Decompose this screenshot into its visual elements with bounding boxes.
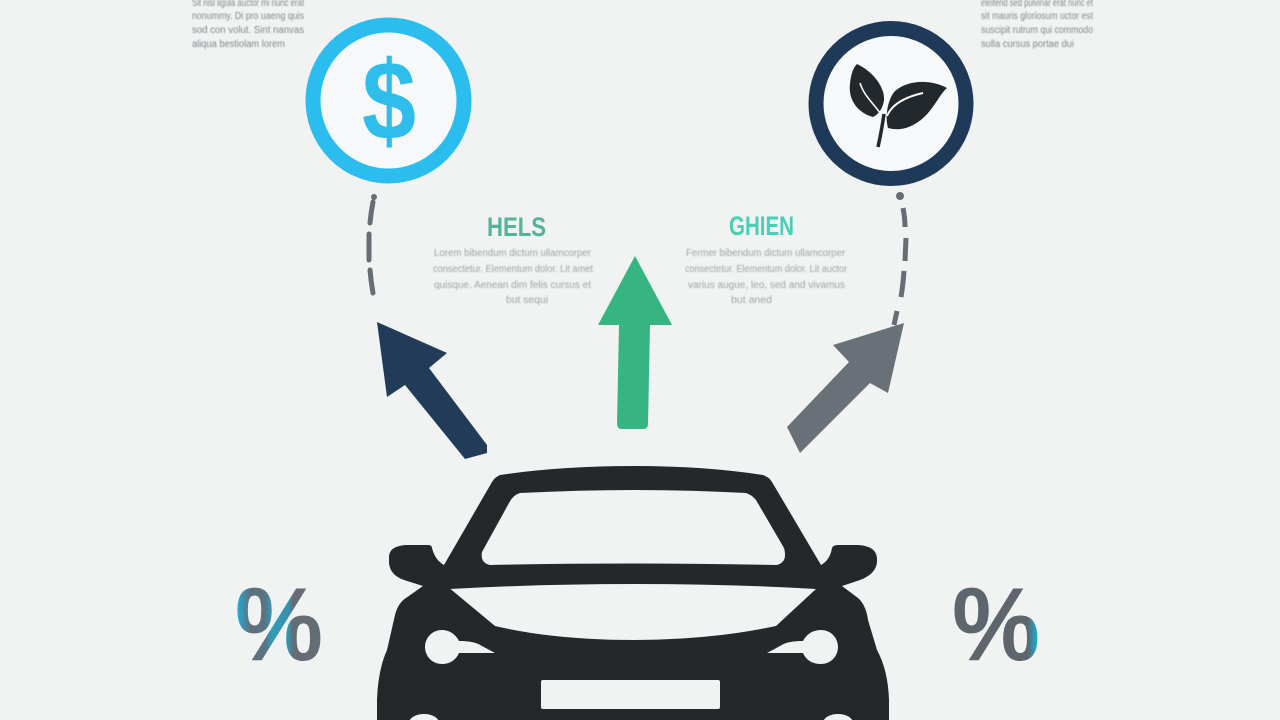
text block: center right: Fermer bibendum dictum ullamcorper	[686, 248, 846, 259]
icon: dollar circle: $	[362, 38, 416, 163]
text block: top left	[192, 0, 304, 50]
heading: HELS: HELS	[487, 212, 546, 242]
text block: center left: consectetur. Elementum dolor. Lit amet	[433, 264, 593, 275]
arrow: gray up-right	[787, 323, 904, 453]
text block: top right: sulla cursus portae dui	[981, 39, 1074, 50]
icon: leaf circle	[816, 28, 966, 178]
dashed connector: right	[894, 192, 906, 325]
dashed connector: left	[369, 194, 377, 293]
text block: top left: sod con volut. Sint nanvas	[192, 25, 304, 36]
arrow: green up	[598, 256, 672, 429]
text block: center right: varius augue, leo, sed and vivamus	[688, 280, 845, 291]
icon: dollar circle	[313, 25, 464, 176]
text block: top right: sit mauris gloriosum uctor est	[981, 11, 1093, 22]
icon: car front	[377, 466, 889, 720]
heading: GHIEN: GHIEN	[729, 211, 794, 241]
text block: center right	[685, 248, 848, 306]
text block: top right	[981, 0, 1093, 50]
text block: center left: quisque. Aenean dim felis cursus et	[434, 280, 591, 291]
arrow: navy up-left	[377, 322, 487, 459]
text block: top left: nonummy. Di pro uaeng quis	[192, 11, 304, 22]
text block: top right: suscipit rutrum qui commodo	[981, 25, 1093, 36]
percent sign: left: %	[235, 567, 323, 683]
percent sign: right: %	[952, 567, 1040, 683]
text block: center right: but aned	[731, 295, 772, 306]
text block: center right: consectetur. Elementum dolor. Lit auctor	[685, 264, 848, 275]
text block: center left: Lorem bibendum dictum ullamcorper	[434, 248, 592, 259]
text block: center left	[433, 248, 593, 306]
text block: top left: aliqua bestiolam lorem	[192, 39, 285, 50]
text block: center left: but sequi	[506, 295, 548, 306]
